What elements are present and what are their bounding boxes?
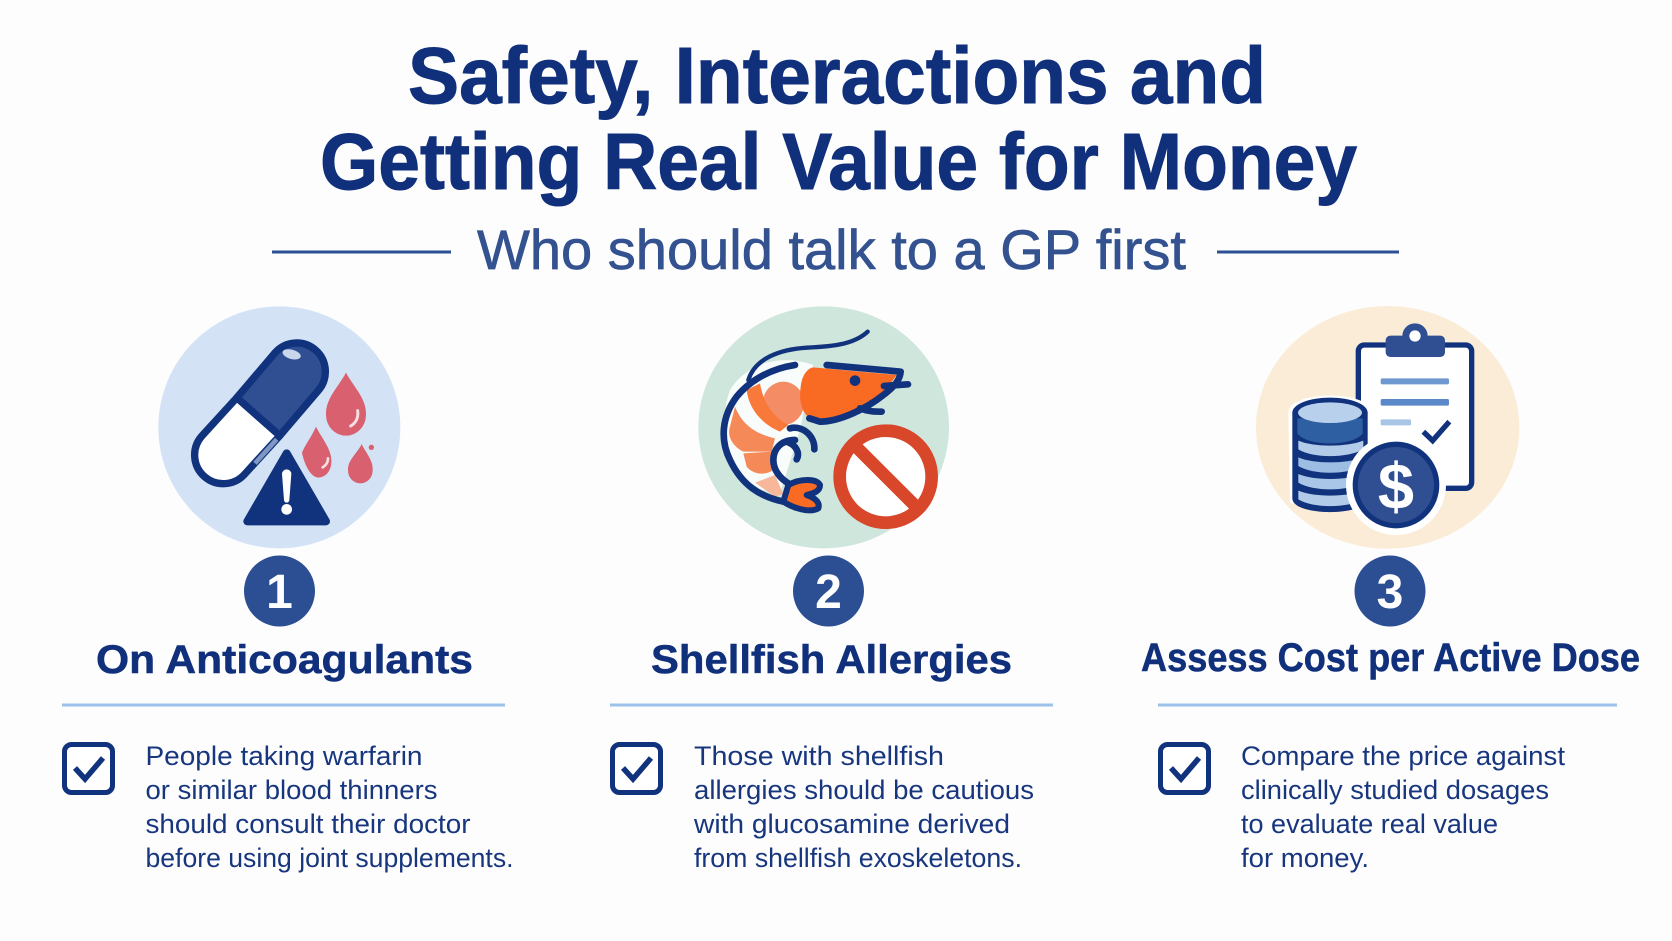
title [320,31,1357,206]
title: Getting Real Value for Money [320,117,1357,206]
number badge 1: 1 [266,566,293,619]
text block: from shellfish exoskeletons. [694,843,1022,873]
text block: People taking warfarin [146,741,422,771]
heading: Shellfish Allergies [651,638,1012,682]
panel: shellfish allergies [610,306,1053,873]
text block: should consult their doctor [146,809,471,839]
text block [146,741,514,873]
number badge 1 [244,556,315,626]
icon: checkbox [1160,744,1208,792]
number badge 2 [793,556,864,626]
text block: clinically studied dosages [1241,775,1549,805]
text block: Compare the price against [1241,741,1566,771]
icon: clipboard, coin stack and dollar coin: $ [1378,449,1414,522]
icon: shrimp with prohibition sign [698,306,949,548]
icon: capsule, blood drops and warning triangle [158,306,400,548]
icon: checkbox [64,744,112,792]
panel: on anticoagulants [62,306,514,873]
text block: to evaluate real value [1241,809,1498,839]
title: Safety, Interactions and [408,31,1266,120]
text block: before using joint supplements. [146,843,514,873]
text block [693,741,1034,873]
text block: Those with shellfish [694,741,944,771]
subtitle: who should talk to a GP first: Who should talk to a GP first [477,218,1186,281]
icon: checkbox [612,744,660,792]
icon: clipboard, coin stack and dollar coin [1256,306,1519,549]
text block: or similar blood thinners [146,775,438,805]
number badge 3 [1354,556,1426,626]
number badge 2: 2 [815,566,842,619]
heading: On Anticoagulants [96,638,473,682]
panel: assess cost per active dose [1141,306,1640,873]
text block: allergies should be cautious [694,775,1034,805]
text block: for money. [1241,843,1369,873]
text block [1241,741,1566,873]
text block: with glucosamine derived [693,809,1010,839]
number badge 3: 3 [1377,566,1403,619]
